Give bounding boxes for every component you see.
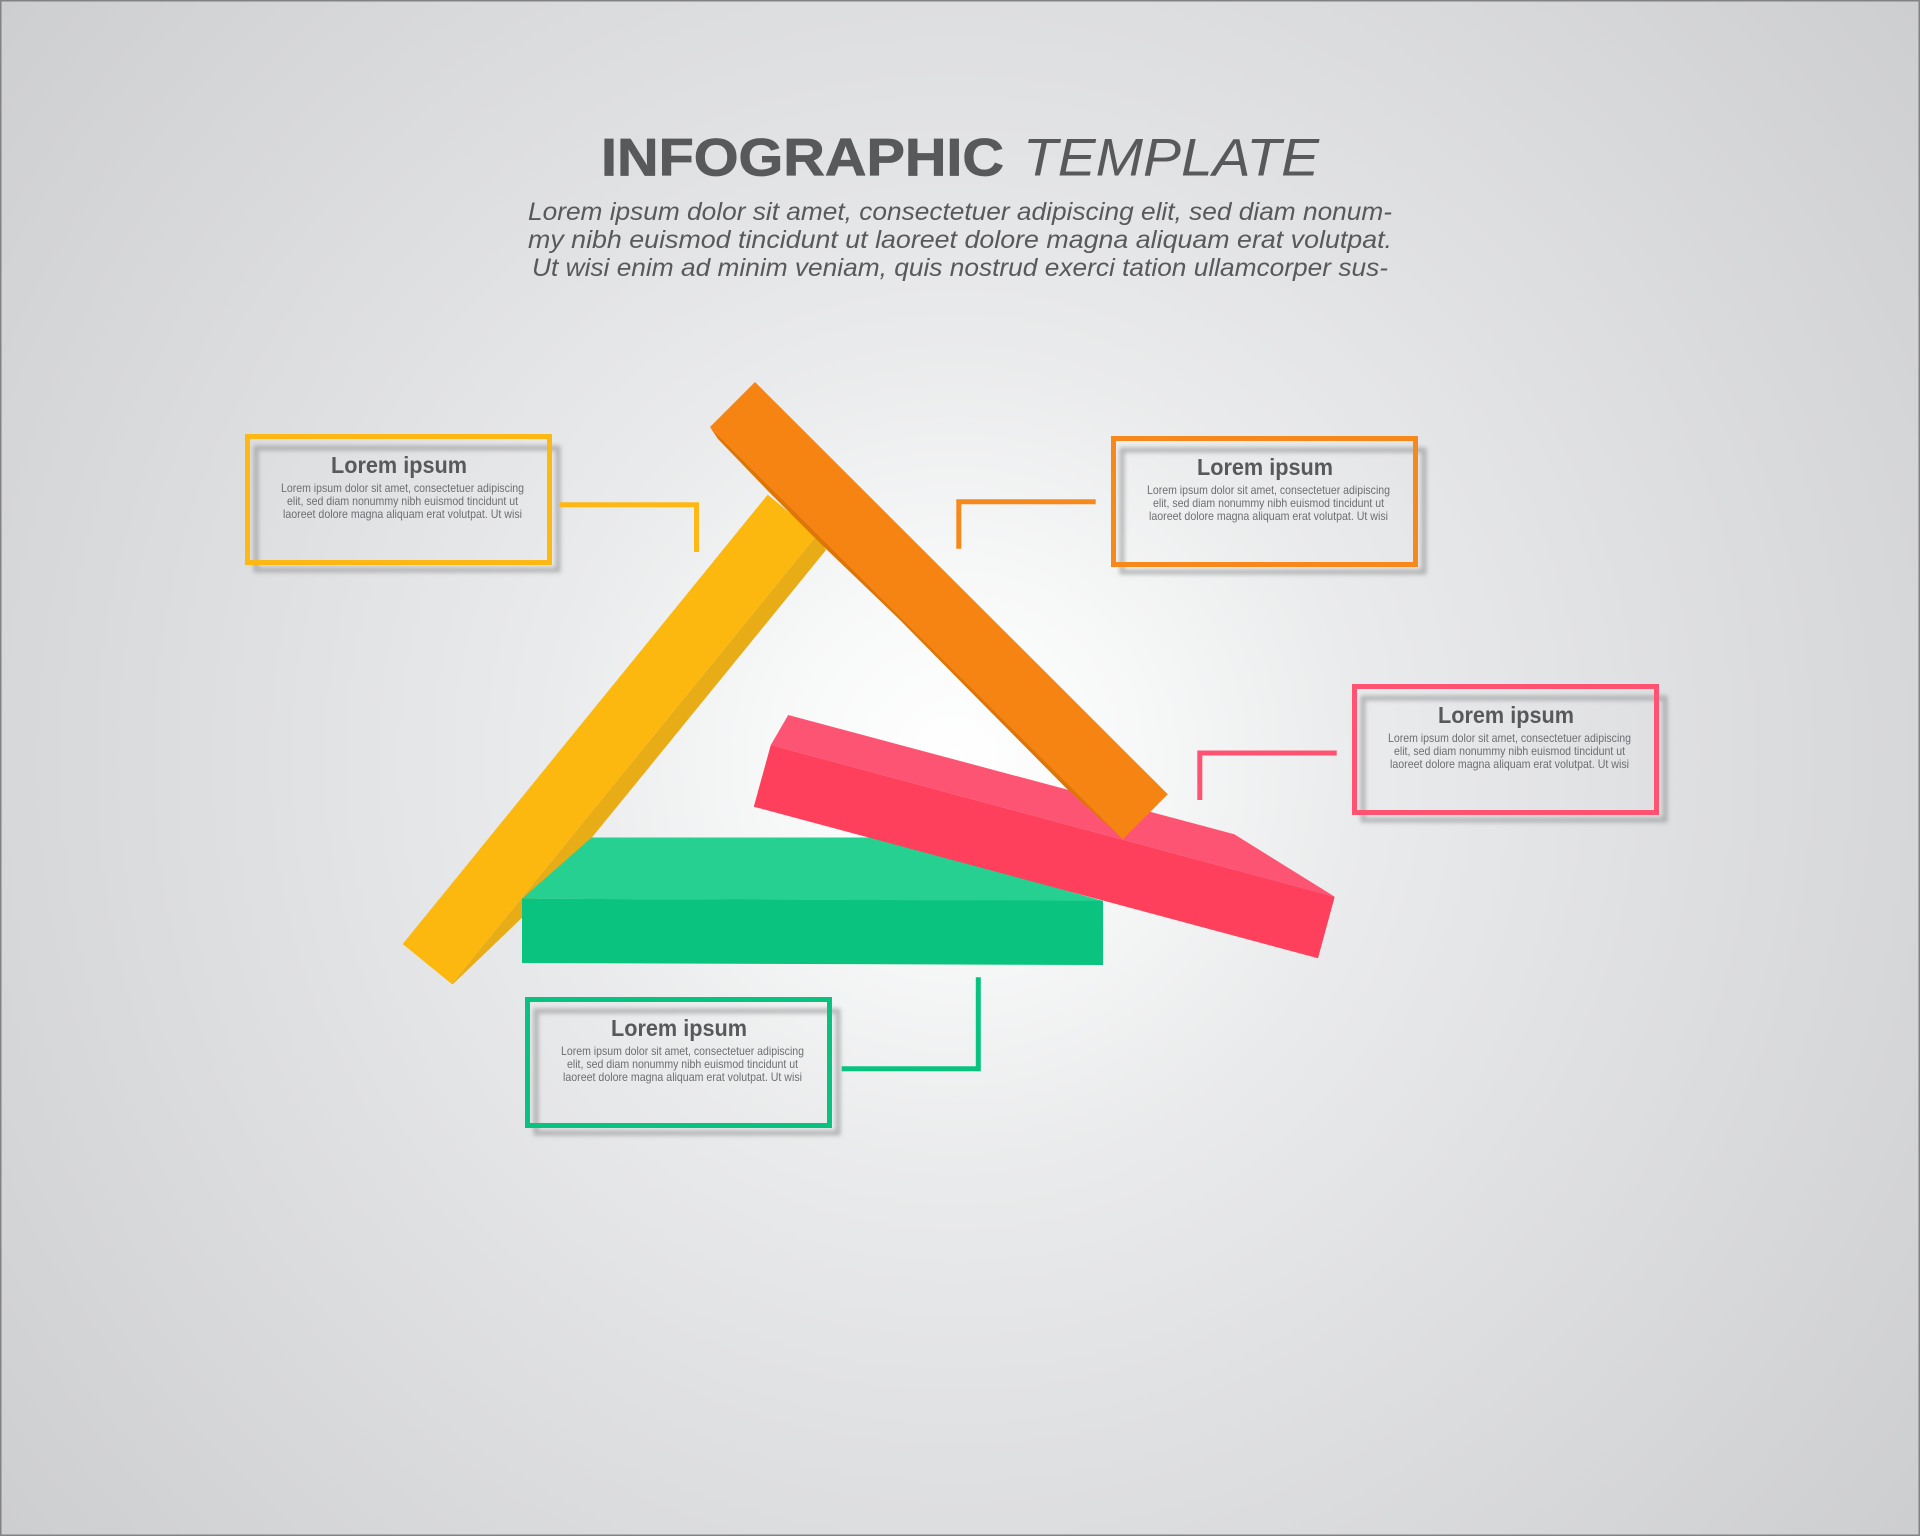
callout: orange: elit, sed diam nonummy nibh euismod tincidunt ut (1153, 496, 1385, 510)
yellow bar (403, 495, 826, 984)
subtitle text block: Lorem ipsum dolor sit amet, consectetuer adipiscing elit, sed diam nonum- (528, 198, 1392, 226)
callout: yellow: Lorem ipsum dolor sit amet, consectetuer adipiscing (281, 481, 524, 495)
callout: green: laoreet dolore magna aliquam erat volutpat. Ut wisi (563, 1070, 802, 1084)
callout: red: Lorem ipsum dolor sit amet, consectetuer adipiscing (1388, 731, 1631, 745)
callout: orange: Lorem ipsum dolor sit amet, consectetuer adipiscing (1147, 483, 1390, 497)
callout: yellow (248, 436, 558, 570)
title: TEMPLATE (1023, 128, 1320, 188)
leader line: yellow (560, 505, 696, 552)
callout: red (1354, 686, 1665, 820)
callout: yellow: Lorem ipsum (331, 452, 467, 478)
callout: red: elit, sed diam nonummy nibh euismod tincidunt ut (1394, 744, 1626, 758)
leader line: orange (959, 502, 1096, 549)
red slab (754, 715, 1335, 958)
green slab (522, 838, 1103, 965)
callout: green (528, 1000, 838, 1133)
callout: yellow: laoreet dolore magna aliquam erat volutpat. Ut wisi (283, 507, 522, 521)
callout: orange: Lorem ipsum (1197, 454, 1333, 480)
callout: green: elit, sed diam nonummy nibh euismod tincidunt ut (567, 1057, 799, 1071)
title: INFOGRAPHIC (601, 128, 1004, 188)
title (601, 128, 1320, 188)
callout: orange (1114, 438, 1424, 572)
callout: orange: laoreet dolore magna aliquam erat volutpat. Ut wisi (1149, 509, 1388, 523)
subtitle text block (528, 198, 1392, 282)
callout: green: Lorem ipsum (611, 1015, 747, 1041)
orange bar (710, 382, 1168, 839)
subtitle text block: my nibh euismod tincidunt ut laoreet dolore magna aliquam erat volutpat. (528, 226, 1392, 254)
leader line: green (842, 977, 978, 1069)
callout: red: laoreet dolore magna aliquam erat volutpat. Ut wisi (1390, 757, 1629, 771)
subtitle text block: Ut wisi enim ad minim veniam, quis nostrud exerci tation ullamcorper sus- (532, 254, 1388, 282)
callout: green: Lorem ipsum dolor sit amet, consectetuer adipiscing (561, 1044, 804, 1058)
callout: red: Lorem ipsum (1438, 702, 1574, 728)
leader line: red (1200, 753, 1337, 800)
callout: yellow: elit, sed diam nonummy nibh euismod tincidunt ut (287, 494, 519, 508)
